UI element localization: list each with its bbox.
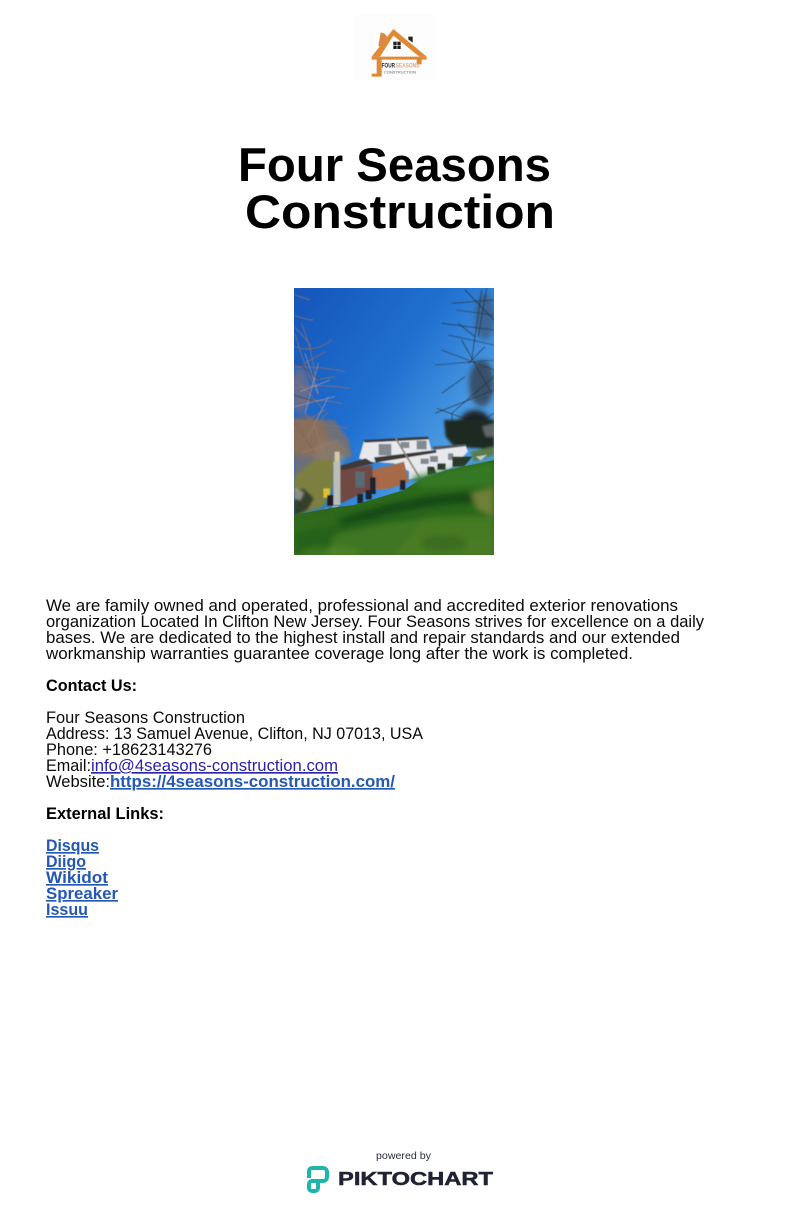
house (321, 437, 487, 514)
photo: house under blue sky (282, 288, 495, 556)
contact details: info@4seasons-construction.com (91, 757, 338, 775)
intro paragraph (45, 597, 705, 663)
external links list (46, 837, 119, 919)
contact details: Email: (46, 757, 91, 775)
distant trees and foliage (294, 420, 494, 517)
contact details: Phone: +18623143276 (46, 741, 212, 759)
intro paragraph: organization Located In Clifton New Jersey. Four Seasons strives for excellence on a daily (46, 613, 705, 631)
external links list: Spreaker (46, 885, 119, 903)
footer: powered by Piktochart (309, 1150, 494, 1191)
logo wordmark: CONSTRUCTION (384, 71, 416, 75)
logo wordmark: SEASONS (396, 62, 419, 69)
footer: powered by Piktochart: powered by (376, 1150, 432, 1162)
title: Construction (245, 185, 555, 238)
external links list: Wikidot (46, 869, 109, 887)
right tree (435, 288, 495, 443)
title: Four Seasons (238, 138, 551, 191)
logo wordmark (382, 62, 419, 75)
icon: Piktochart logo mark (309, 1168, 327, 1191)
title (238, 138, 555, 238)
intro paragraph: We are family owned and operated, professional and accredited exterior renovations (46, 597, 678, 615)
heading: contact us: Contact Us: (46, 677, 137, 695)
intro paragraph: workmanship warranties guarantee coverage long after the work is completed. (45, 645, 633, 663)
intro paragraph: bases. We are dedicated to the highest install and repair standards and our extended (46, 629, 680, 647)
logo: Four Seasons Construction (354, 13, 436, 80)
external links list: Issuu (46, 901, 88, 919)
logo wordmark: FOUR (382, 62, 395, 69)
external links list: Disqus (46, 837, 99, 855)
contact details: Website: (46, 773, 110, 791)
contact details: Address: 13 Samuel Avenue, Clifton, NJ 07013, USA (46, 725, 423, 743)
left tree (294, 294, 350, 466)
icon: house roof (372, 29, 427, 77)
contact details: Four Seasons Construction (46, 709, 245, 727)
contact details (46, 709, 423, 791)
contact details: https://4seasons-construction.com/ (110, 773, 395, 791)
heading: external links: External Links: (46, 805, 164, 823)
footer: powered by Piktochart: PIKTOCHART (338, 1168, 494, 1189)
lawn (294, 460, 494, 556)
external links list: Diigo (46, 853, 86, 871)
